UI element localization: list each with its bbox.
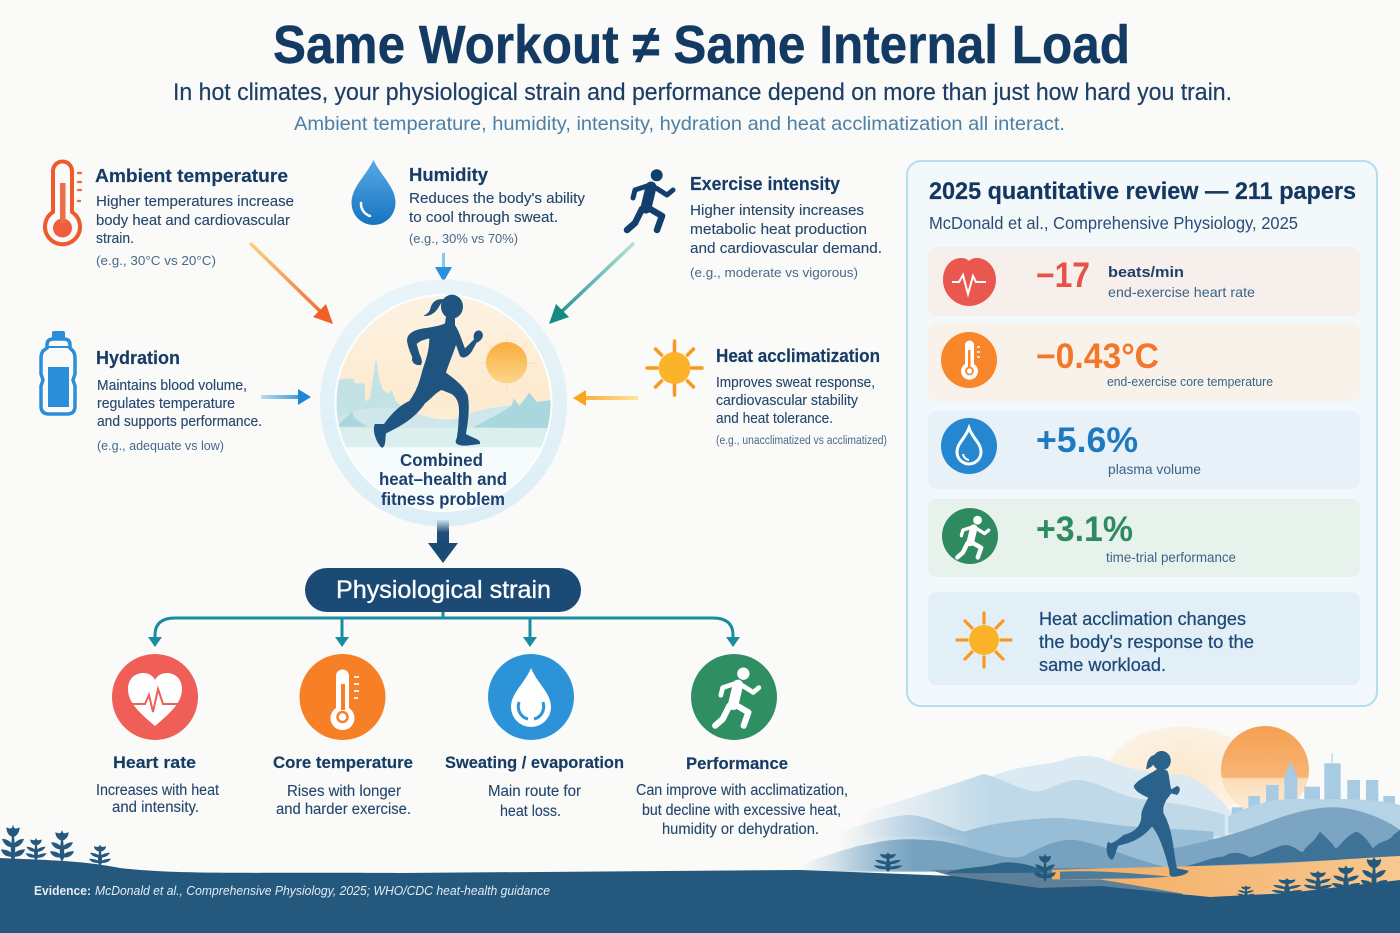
description: and heat tolerance. xyxy=(716,411,833,427)
arrow: exercise to center xyxy=(549,243,634,324)
landscape scene xyxy=(0,726,1400,933)
description: to cool through sweat. xyxy=(409,209,558,226)
panel: quantitative review xyxy=(907,161,1377,706)
icon: sun xyxy=(957,613,1011,667)
callout text xyxy=(1039,609,1254,675)
label: Heart rate xyxy=(113,753,196,772)
panel citation: McDonald et al., Comprehensive Physiology, 2025 xyxy=(929,213,1298,233)
example: (e.g., 30°C vs 20°C) xyxy=(96,253,216,268)
description xyxy=(690,202,882,257)
icon: thermometer xyxy=(941,332,997,388)
description: Increases with heat xyxy=(96,782,220,799)
heading: hydration: Hydration xyxy=(96,348,180,368)
description xyxy=(276,783,411,818)
icon: runner xyxy=(691,654,777,740)
icon: sweat drop xyxy=(488,654,574,740)
factor: hydration xyxy=(41,331,262,453)
arrow: center to strain xyxy=(428,520,458,563)
description: regulates temperature xyxy=(97,396,235,412)
heading: exercise intensity: Exercise intensity xyxy=(690,174,840,194)
example: (e.g., 30% vs 70%) xyxy=(409,232,518,246)
heading pill: physiological strain: Physiological strain xyxy=(336,576,551,604)
description: and cardiovascular demand. xyxy=(690,240,882,257)
description: Maintains blood volume, xyxy=(97,378,247,394)
value: −0.43°C xyxy=(1036,337,1159,376)
description xyxy=(636,782,848,838)
connector arrowheads xyxy=(148,637,740,647)
stat row: plasma volume xyxy=(928,411,1360,489)
description: strain. xyxy=(96,230,134,247)
center scene xyxy=(336,296,550,448)
heading: heat acclimatization: Heat acclimatization xyxy=(716,346,880,366)
callout text: Heat acclimation changes xyxy=(1039,609,1246,629)
center circle: combined problem xyxy=(320,280,567,526)
connector tree xyxy=(155,612,733,640)
description xyxy=(96,782,220,816)
caption: time-trial performance xyxy=(1106,550,1236,565)
icon: bottle xyxy=(41,331,75,414)
output: performance xyxy=(636,654,848,838)
label: Sweating / evaporation xyxy=(445,753,624,772)
icon: water drop xyxy=(352,160,396,225)
output: heart rate xyxy=(96,654,220,816)
description: Main route for xyxy=(488,783,581,800)
caption: plasma volume xyxy=(1108,462,1201,477)
stat row: core temperature xyxy=(928,323,1360,401)
callout text: same workload. xyxy=(1039,655,1166,675)
callout text: the body's response to the xyxy=(1039,632,1254,652)
icon: heart xyxy=(112,654,198,740)
panel heading: 2025 quantitative review — 211 papers xyxy=(929,178,1356,205)
center label: fitness problem xyxy=(381,489,505,509)
description xyxy=(409,190,586,226)
value: −17 xyxy=(1036,256,1090,295)
center label: Combined xyxy=(400,450,483,470)
arrow: temperature to center xyxy=(250,243,333,324)
stat row: time-trial performance xyxy=(928,499,1360,577)
caption: end-exercise heart rate xyxy=(1108,284,1255,300)
label: Core temperature xyxy=(273,753,413,772)
sunset, skyline and near hills xyxy=(1052,726,1400,898)
evidence footnote: Evidence: xyxy=(34,884,91,898)
icon: drop xyxy=(941,418,997,474)
value: +5.6% xyxy=(1036,421,1138,460)
description xyxy=(97,378,262,430)
description: humidity or dehydration. xyxy=(662,821,819,838)
description xyxy=(96,193,294,247)
title: Same Workout ≠ Same Internal Load xyxy=(273,15,1130,75)
far hills xyxy=(800,727,1257,907)
description: Rises with longer xyxy=(287,783,401,800)
description xyxy=(488,783,581,820)
icon: thermometer xyxy=(45,162,82,244)
description: and intensity. xyxy=(112,799,199,816)
heading: humidity: Humidity xyxy=(409,165,488,185)
heading: ambient temperature: Ambient temperature xyxy=(95,165,288,186)
center label xyxy=(379,450,507,509)
description: and supports performance. xyxy=(97,414,262,430)
description: body heat and cardiovascular xyxy=(96,212,290,229)
factor: exercise intensity xyxy=(627,169,882,280)
icon: runner xyxy=(627,169,673,230)
example: (e.g., unacclimatized vs acclimatized) xyxy=(716,435,887,447)
factor: humidity xyxy=(352,160,586,246)
bottom runner xyxy=(1107,751,1188,877)
center runner xyxy=(374,295,483,448)
unit: beats/min xyxy=(1108,265,1184,281)
output: core temperature xyxy=(273,654,413,818)
example: (e.g., moderate vs vigorous) xyxy=(690,265,858,280)
icon: thermometer xyxy=(300,654,386,740)
factor: ambient temperature xyxy=(45,162,294,268)
description: but decline with excessive heat, xyxy=(642,802,841,819)
ground xyxy=(0,858,1400,933)
description: and harder exercise. xyxy=(276,801,411,818)
icon: sun xyxy=(647,341,702,395)
plants: left xyxy=(1,824,111,866)
output: sweating xyxy=(445,654,624,820)
description: cardiovascular stability xyxy=(716,393,859,409)
arrow: acclimatization to center xyxy=(573,390,638,406)
icon: runner xyxy=(942,508,998,564)
plants: right xyxy=(874,852,1387,898)
example: (e.g., adequate vs low) xyxy=(97,439,224,453)
value: +3.1% xyxy=(1036,510,1133,549)
description: Higher temperatures increase xyxy=(96,193,294,210)
callout: heat acclimation xyxy=(928,592,1360,685)
label: Performance xyxy=(686,754,788,773)
arrow: hydration to center xyxy=(261,389,311,405)
caption: end-exercise core temperature xyxy=(1107,375,1273,389)
description: metabolic heat production xyxy=(690,221,867,238)
icon: heart xyxy=(943,258,996,306)
secondary subtitle: Ambient temperature, humidity, intensity, hydration and heat acclimatization all interact. xyxy=(294,113,1065,135)
description: heat loss. xyxy=(500,803,561,820)
arrow: humidity to center xyxy=(435,253,452,282)
factor: heat acclimatization xyxy=(647,341,887,447)
description: Higher intensity increases xyxy=(690,202,864,219)
description: Reduces the body's ability xyxy=(409,190,586,207)
stat row: heart rate xyxy=(928,247,1360,316)
description: Can improve with acclimatization, xyxy=(636,782,848,799)
description: Improves sweat response, xyxy=(716,375,875,391)
description xyxy=(716,375,875,427)
heading pill: physiological strain xyxy=(305,568,581,612)
center label: heat–health and xyxy=(379,469,507,489)
evidence footnote: McDonald et al., Comprehensive Physiology, 2025; WHO/CDC heat-health guidance xyxy=(95,884,550,898)
subtitle: In hot climates, your physiological strain and performance depend on more than just how hard you train. xyxy=(173,79,1232,106)
